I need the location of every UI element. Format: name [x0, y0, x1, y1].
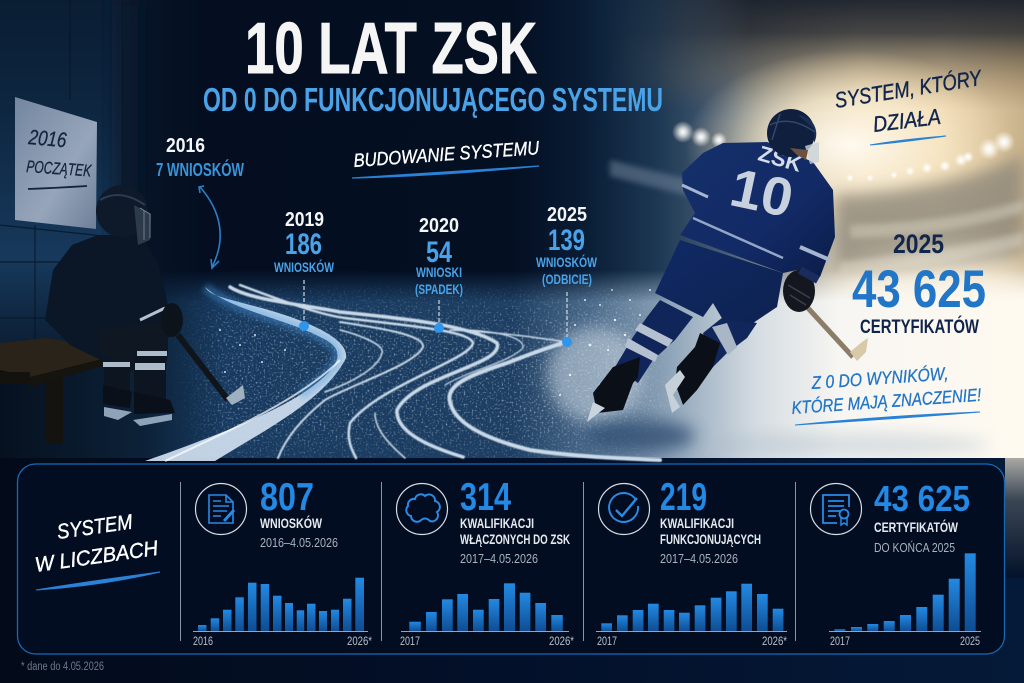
bar chart: wnioski — [193, 578, 372, 648]
bar chart: certyfikaty: 2025 — [960, 634, 980, 648]
bench — [0, 338, 130, 444]
stat: 219 kwalifikacji funkcjonujących: KWALIFIKACJI — [660, 515, 734, 531]
stat: 807 wniosków: 2016–4.05.2026 — [260, 535, 338, 550]
footnote: * dane do 4.05.2026 — [21, 661, 104, 673]
stat: 807 wniosków: WNIOSKÓW — [260, 514, 323, 531]
bar chart: wnioski: 2026* — [347, 634, 372, 648]
callout: z 0 do wyników: KTÓRE MAJĄ ZNACZENIE! — [791, 384, 982, 418]
jersey — [680, 142, 835, 277]
callout: system który działa: DZIAŁA — [872, 104, 942, 137]
left locker-room wall — [0, 0, 138, 360]
jersey number: 10 — [725, 158, 798, 229]
ice path: building the system — [145, 285, 660, 461]
panel: system w liczbach — [18, 464, 1004, 654]
panel heading: W LICZBACH — [33, 537, 160, 577]
stat: 43 625 certyfikatów: DO KOŃCA 2025 — [874, 540, 955, 555]
icon: certificate — [810, 484, 862, 534]
milestone 2025: 2025 — [547, 204, 587, 226]
milestone 2016: 2016 — [166, 135, 205, 157]
left leg and skate — [587, 300, 693, 422]
milestone 2019: 2019 — [285, 209, 324, 231]
milestone 2020: WNIOSKI — [416, 264, 462, 280]
result: 2025 certificates — [852, 229, 986, 338]
bar chart: wnioski: 2016 — [193, 634, 213, 648]
milestone 2020: 2020 — [419, 215, 459, 237]
stat: 314 kwalifikacji włączonych: WŁĄCZONYCH DO ZSK — [460, 531, 570, 547]
helmet — [767, 109, 819, 164]
stat: 807 wniosków: 807 — [260, 476, 314, 519]
wall sign: 2016 początek: 2016 — [27, 126, 68, 152]
stat: 314 kwalifikacji włączonych: 2017–4.05.2026 — [460, 551, 538, 566]
milestone 2025: WNIOSKÓW — [536, 253, 598, 270]
milestone 2019 — [274, 209, 335, 331]
panel heading — [33, 511, 160, 590]
background: arena scene — [28, 0, 1024, 458]
bar chart: kwalifikacje ZSK: 2026* — [549, 634, 574, 648]
subtitle: OD 0 DO FUNKCJONUJĄCEGO SYSTEMU — [203, 81, 663, 118]
stat: 219 kwalifikacji funkcjonujących: FUNKCJONUJĄCYCH — [660, 531, 761, 547]
heading: budowanie systemu: BUDOWANIE SYSTEMU — [353, 138, 540, 172]
bar chart: certyfikaty: 2017 — [830, 634, 850, 648]
title: 10 LAT ZSK — [245, 9, 537, 89]
result: 2025 certificates: CERTYFIKATÓW — [860, 316, 979, 338]
result: 2025 certificates: 2025 — [893, 229, 944, 259]
milestone 2025: 139 — [548, 224, 585, 257]
panel heading: SYSTEM — [55, 511, 134, 544]
stat: 219 kwalifikacji funkcjonujących — [596, 476, 787, 648]
stat: 807 wniosków — [193, 476, 372, 648]
spray of ice — [219, 289, 656, 396]
bar chart: kwalifikacje funkcjonujące: 2017 — [597, 634, 617, 648]
milestone 2025: (ODBICIE) — [542, 271, 592, 287]
result: 2025 certificates: 43 625 — [852, 260, 986, 319]
stat: 219 kwalifikacji funkcjonujących: 219 — [660, 476, 707, 519]
rink surface — [0, 270, 1024, 470]
bar chart: kwalifikacje ZSK: 2017 — [400, 634, 420, 648]
stat: 314 kwalifikacji włączonych — [396, 476, 574, 648]
stat: 43 625 certyfikatów: CERTYFIKATÓW — [874, 518, 959, 535]
milestone 2019: 186 — [285, 228, 322, 261]
milestone 2025 — [536, 204, 598, 347]
bar chart: kwalifikacje funkcjonujące: 2026* — [762, 634, 787, 648]
milestone 2016: 7 WNIOSKÓW — [156, 159, 244, 180]
milestone 2016 — [156, 135, 244, 180]
wall sign: 2016 początek: POCZĄTEK — [26, 157, 92, 181]
icon: check mark — [598, 484, 650, 534]
milestone 2020 — [415, 215, 463, 333]
wall sign: 2016 początek — [15, 97, 97, 229]
stat: 219 kwalifikacji funkcjonujących: 2017–4.05.2026 — [660, 551, 738, 566]
glove — [783, 270, 818, 312]
right leg and skate — [665, 317, 757, 413]
stat: 314 kwalifikacji włączonych: 314 — [460, 476, 511, 519]
milestone 2019: WNIOSKÓW — [274, 258, 335, 275]
hero player ZSK 10 — [587, 109, 868, 422]
stat: 43 625 certyfikatów — [810, 478, 981, 648]
stick — [807, 307, 868, 361]
milestone 2020: 54 — [426, 236, 452, 269]
jersey lettering: ZSK — [755, 141, 805, 177]
callout: system który działa: SYSTEM, KTÓRY — [833, 65, 984, 113]
callout: z 0 do wyników: Z 0 DO WYNIKÓW, — [810, 362, 949, 393]
milestone 2020: (SPADEK) — [415, 281, 463, 297]
shorts — [655, 240, 783, 323]
bar chart: kwalifikacje ZSK — [400, 583, 574, 648]
bar chart: kwalifikacje funkcjonujące — [596, 584, 787, 648]
stat: 43 625 certyfikatów: 43 625 — [874, 478, 970, 519]
young player sitting, seen from behind — [45, 185, 245, 426]
icon: document with pen — [196, 484, 246, 534]
bar chart: certyfikaty — [829, 553, 981, 648]
callout: z 0 do wyników — [791, 362, 982, 425]
stadium lights — [672, 121, 1015, 182]
arrow from 2016 to path start — [199, 186, 220, 268]
icon: puzzle cluster — [396, 484, 448, 534]
stat: 314 kwalifikacji włączonych: KWALIFIKACJI — [460, 515, 534, 531]
callout: system który działa — [833, 65, 984, 145]
dark strip under the rink — [0, 458, 1024, 683]
